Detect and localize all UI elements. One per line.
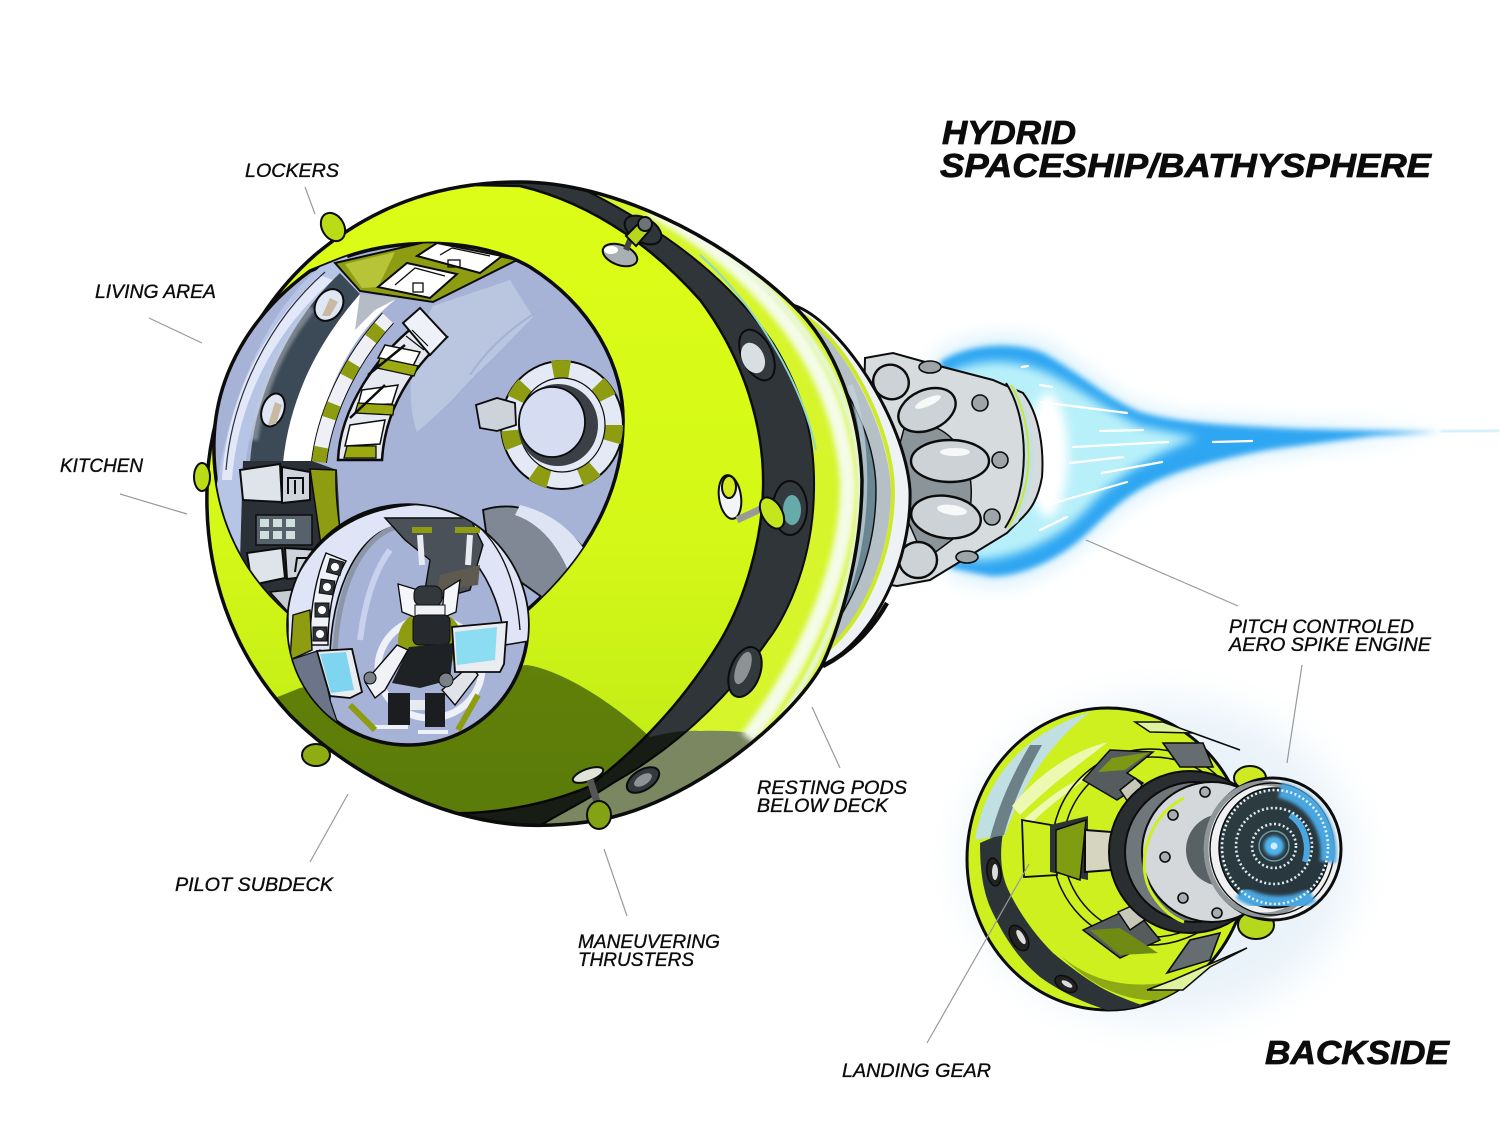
- label: resting pods below deck: RESTING PODS: [757, 778, 907, 799]
- label: maneuvering thrusters: [578, 932, 720, 971]
- olive seat base ring: [378, 618, 482, 718]
- dark hull strip: [250, 273, 360, 463]
- maneuvering thrusters: [571, 210, 789, 829]
- striped arc: [319, 318, 388, 462]
- glass reflection: [411, 280, 533, 432]
- dark band: [980, 836, 1143, 1010]
- button column: [310, 553, 346, 645]
- label: resting pods below deck: [757, 778, 907, 817]
- main sphere hull with lime rim and dark band: [150, 178, 862, 835]
- band portholes: [622, 324, 807, 798]
- backside view glow: [965, 700, 1355, 1020]
- leader line: landing gear: [927, 864, 1029, 1043]
- deck struts: [350, 695, 478, 730]
- title: SPACESHIP/BATHYSPHERE: [940, 147, 1432, 184]
- stairs: [338, 308, 447, 460]
- leader line: lockers: [305, 187, 315, 214]
- locker bumps on hull: [194, 209, 350, 766]
- leader line: engine backside: [1287, 665, 1302, 763]
- backside heading: BACKSIDE: [1265, 1034, 1450, 1071]
- pilot seat: [364, 580, 478, 732]
- arch ring: [288, 505, 528, 716]
- rear hull rings: [760, 305, 910, 667]
- nozzle: [1205, 778, 1341, 920]
- engine flame: [935, 340, 1500, 582]
- circular hatch: [476, 361, 623, 489]
- top olive ceiling bar with lockers: [335, 241, 517, 302]
- leader line: aero spike engine: [1086, 540, 1238, 606]
- outer glass shell: [216, 256, 359, 580]
- white band: [283, 294, 395, 463]
- kitchen wall: [240, 461, 345, 612]
- title: [940, 114, 1432, 184]
- landing gear bays: [1022, 722, 1247, 990]
- portholes: [314, 288, 344, 322]
- label: maneuvering thrusters: MANEUVERING: [578, 932, 720, 953]
- leader line: pilot subdeck: [310, 794, 348, 862]
- lower hull shading: [1060, 956, 1177, 1000]
- label: pitch controled aero spike engine: AERO SPIKE ENGINE: [1228, 635, 1431, 656]
- rear lime pods: [1234, 766, 1266, 790]
- lower bay arches: [482, 505, 583, 596]
- glass area: [975, 712, 1090, 840]
- leader line: kitchen: [120, 494, 187, 514]
- label: lockers: LOCKERS: [245, 161, 339, 182]
- ceiling equipment: [385, 518, 483, 600]
- backside view of ship: [967, 708, 1341, 1012]
- engine mount: [1109, 771, 1271, 933]
- lime body: [208, 184, 764, 814]
- engine pods: [867, 358, 989, 578]
- label: kitchen: KITCHEN: [60, 456, 143, 477]
- aero spike engine dome: [860, 353, 1042, 586]
- band portholes: [985, 857, 1080, 996]
- label: living area: LIVING AREA: [95, 282, 216, 303]
- label: pitch controled aero spike engine: PITCH CONTROLED: [1229, 617, 1414, 638]
- green side panel: [290, 610, 312, 660]
- rim highlights: [650, 208, 848, 738]
- label: pitch controled aero spike engine: [1228, 617, 1431, 656]
- label: maneuvering thrusters: THRUSTERS: [578, 950, 694, 971]
- label: pilot subdeck: PILOT SUBDECK: [175, 875, 334, 896]
- label: resting pods below deck: BELOW DECK: [757, 796, 889, 817]
- hull shadow: [277, 665, 758, 824]
- backside sphere: [967, 708, 1249, 1010]
- dark band: [466, 184, 816, 824]
- right monitor: [452, 622, 507, 672]
- leader line: resting pods: [812, 707, 840, 768]
- leader line: living area: [149, 318, 202, 343]
- label: landing gear: LANDING GEAR: [842, 1061, 991, 1082]
- pilot subdeck porthole: [286, 503, 530, 747]
- leader line: maneuvering thrusters: [604, 849, 627, 916]
- large cutaway window: [210, 241, 623, 612]
- concentric hull lines: [1052, 749, 1248, 945]
- left monitor: [317, 649, 362, 698]
- title: HYDRID: [942, 114, 1076, 151]
